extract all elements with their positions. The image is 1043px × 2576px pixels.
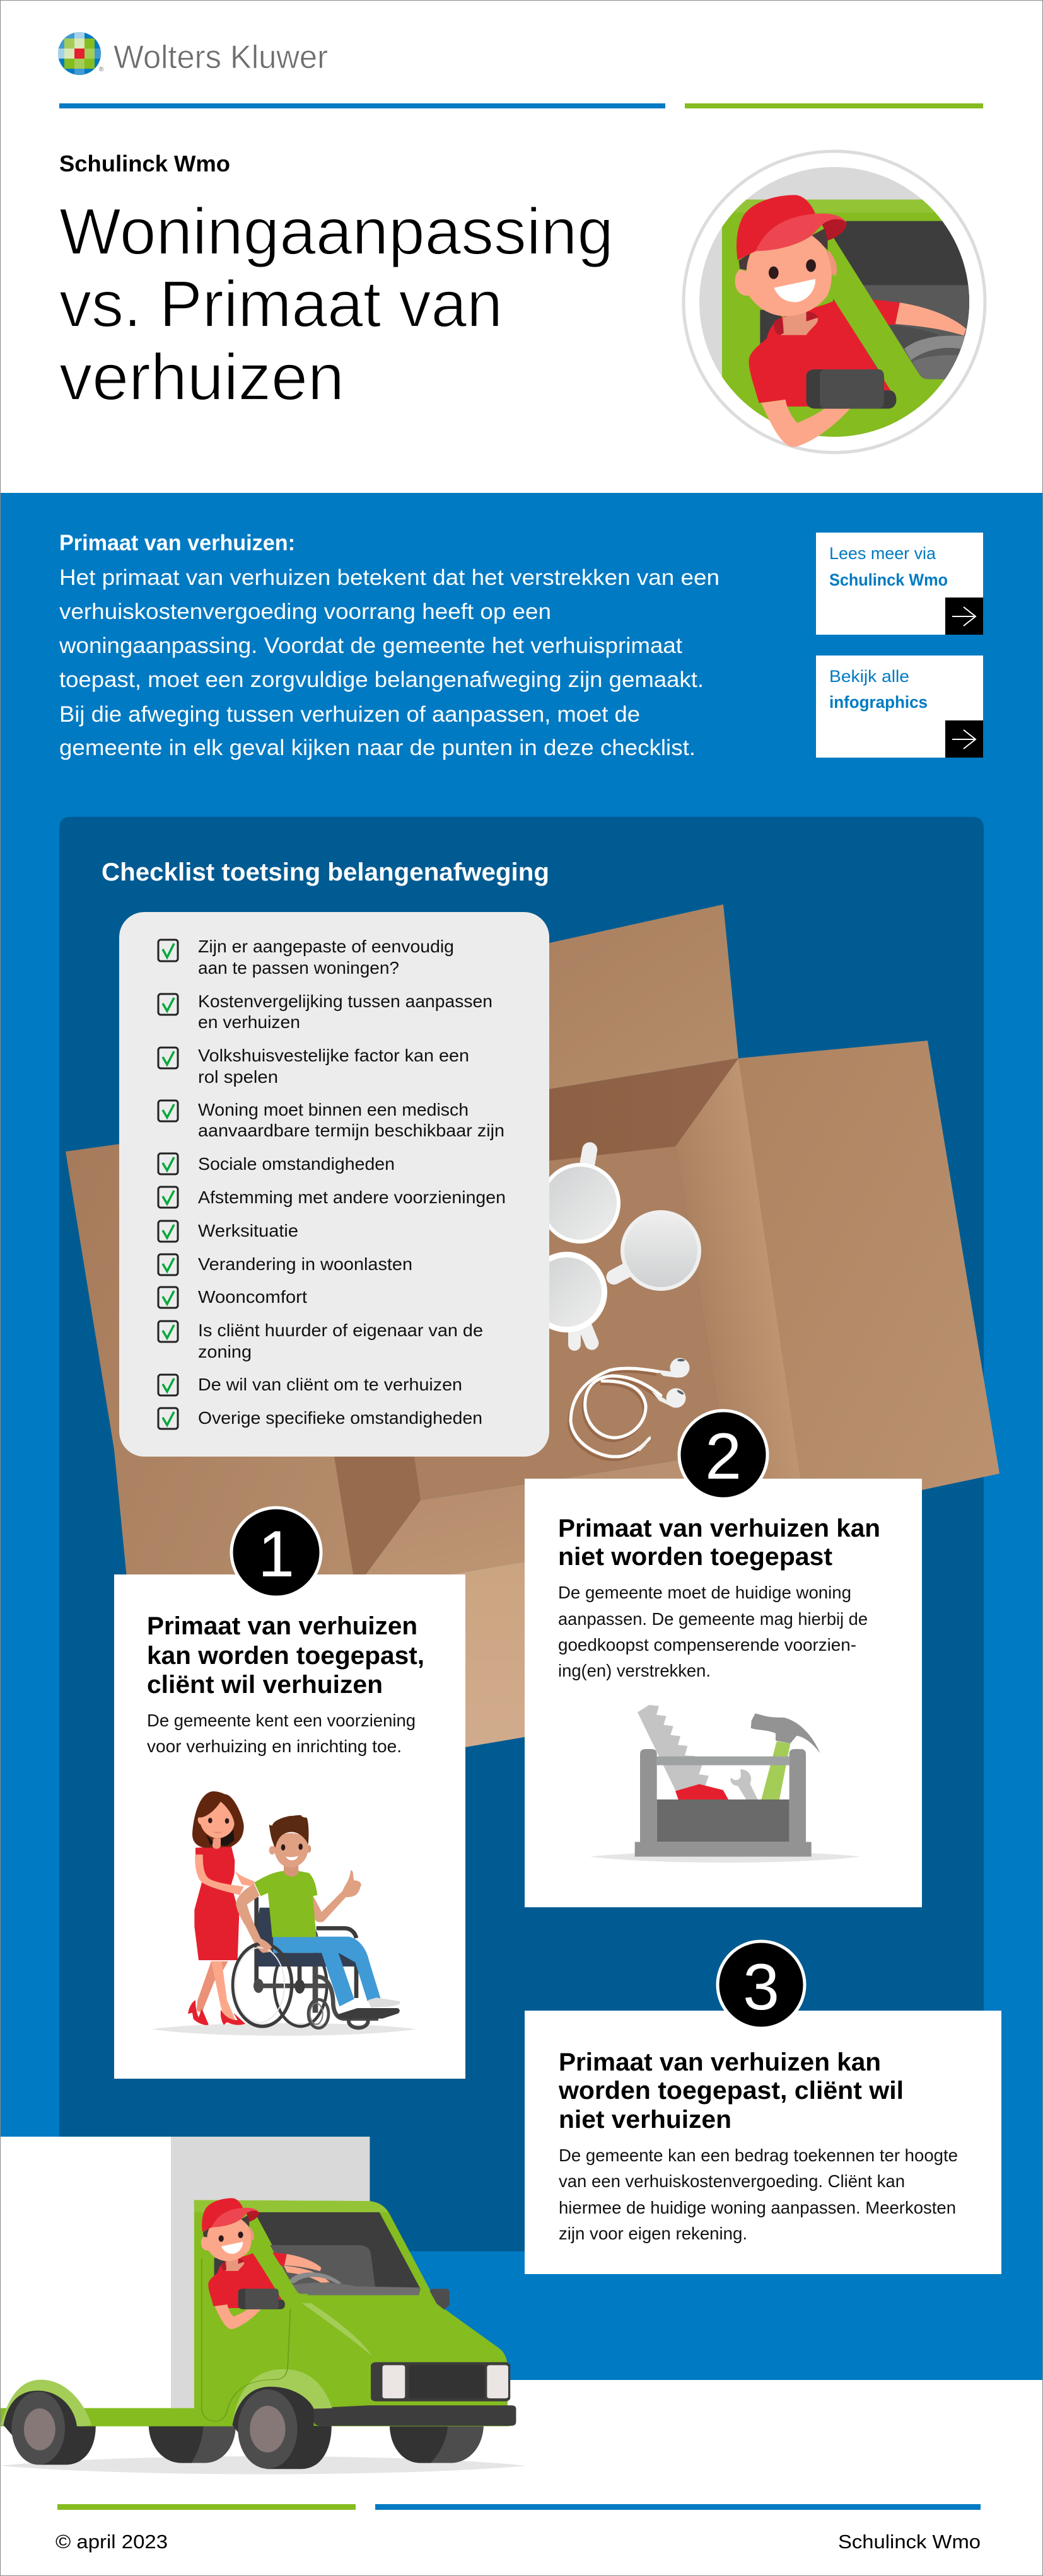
card 1 body: De gemeente kent een voorziening [147, 1711, 416, 1730]
hood highlight [302, 2303, 372, 2356]
door line [202, 2244, 291, 2421]
card 1 body [147, 1711, 416, 1756]
rear wheels behind [149, 2424, 236, 2463]
card 2 [525, 1411, 922, 1907]
checklist items: Is cliënt huurder of eigenaar van de [198, 1320, 483, 1340]
card 2 heading: niet worden toegepast [558, 1543, 832, 1571]
number badge 3: 3 [743, 1951, 779, 2024]
checklist items: Werksituatie [198, 1221, 298, 1240]
panel: checklist [119, 912, 549, 1457]
checklist items: en verhuizen [198, 1012, 300, 1032]
title: vs. Primaat van [59, 268, 503, 341]
card 2 body [558, 1583, 868, 1680]
card 3 heading: Primaat van verhuizen kan [559, 2048, 881, 2076]
button: infographics [816, 656, 983, 758]
logo globe icon [58, 32, 101, 75]
card 3 [525, 1941, 1001, 2274]
card 1 body: voor verhuizing en inrichting toe. [147, 1736, 402, 1756]
card 3 body: van een verhuiskostenvergoeding. Cliënt kan [559, 2171, 905, 2191]
intro paragraph: toepast, moet een zorgvuldige belangenafweging zijn gemaakt. [59, 667, 704, 692]
footer date: © april 2023 [55, 2531, 168, 2553]
card 1 heading: cliënt wil verhuizen [147, 1671, 383, 1699]
rear wheel [3, 2391, 96, 2465]
card 2 heading: Primaat van verhuizen kan [558, 1515, 880, 1542]
card 2 heading [558, 1515, 880, 1571]
header bar blue [59, 103, 665, 108]
cab [0, 2200, 510, 2427]
bumper [313, 2405, 516, 2426]
number badge 1 [231, 1508, 321, 1597]
card 1 [114, 1508, 465, 2079]
title: verhuizen [59, 341, 344, 414]
checklist items: De wil van cliënt om te verhuizen [198, 1375, 462, 1394]
checklist items: Verandering in woonlasten [198, 1254, 412, 1274]
button: infographics: infographics [829, 693, 928, 712]
checklist items: Wooncomfort [198, 1287, 307, 1307]
panel: checklist background [59, 817, 984, 2251]
cups [527, 1141, 701, 1352]
card 2 body: aanpassen. De gemeente mag hierbij de [558, 1609, 868, 1629]
ground shadow [0, 2456, 527, 2475]
button: infographics: Bekijk alle [829, 667, 909, 686]
subtitle: Schulinck Wmo [59, 151, 230, 176]
number badge 2: 2 [705, 1420, 742, 1493]
checklist items: Kostenvergelijking tussen aanpassen [198, 991, 492, 1011]
intro text [59, 531, 720, 760]
footer bar green [57, 2504, 356, 2510]
intro paragraph: woningaanpassing. Voordat de gemeente het verhuisprimaat [59, 633, 682, 658]
card 1 heading [147, 1612, 424, 1699]
button: lees meer [816, 533, 983, 635]
checklist items: Volkshuisvestelijke factor kan een [198, 1046, 469, 1065]
checklist heading: Checklist toetsing belangenafweging [102, 858, 549, 886]
footer bar blue [375, 2504, 981, 2510]
intro paragraph [59, 565, 720, 760]
checklist items: Woning moet binnen een medisch [198, 1100, 469, 1119]
man [236, 1815, 400, 2019]
checklist items: Zijn er aangepaste of eenvoudig [198, 937, 454, 956]
card 2 body: ing(en) verstrekken. [558, 1661, 711, 1680]
checklist items: aan te passen woningen? [198, 958, 399, 978]
icon: arrow [952, 730, 976, 749]
card 3 body: zijn voor eigen rekening. [559, 2224, 747, 2243]
card 3 body: hiermee de huidige woning aanpassen. Meerkosten [559, 2198, 956, 2217]
checklist items: zoning [198, 1342, 252, 1361]
number badge 1: 1 [258, 1518, 294, 1591]
illustration: couple with wheelchair [151, 1791, 416, 2036]
title [59, 195, 614, 414]
card 3 body: De gemeente kan een bedrag toekennen ter hoogte [559, 2146, 958, 2165]
checklist items: Afstemming met andere voorzieningen [198, 1187, 506, 1207]
number badge 3 [718, 1941, 805, 2028]
woman [188, 1791, 254, 2025]
blue section background [0, 493, 1043, 2380]
logo wordmark: Wolters Kluwer [114, 39, 328, 76]
logo: Wolters Kluwer [58, 32, 328, 76]
icon: arrow [952, 607, 976, 626]
intro paragraph: Het primaat van verhuizen betekent dat het verstrekken van een [59, 565, 720, 590]
grille [371, 2362, 510, 2401]
wheelchair [257, 1897, 378, 2028]
intro paragraph: verhuiskostenvergoeding voorrang heeft op een [59, 599, 551, 624]
truck box [0, 2137, 370, 2408]
front wheel [233, 2387, 332, 2469]
icon: driver in circle [684, 151, 993, 462]
card 3 heading: worden toegepast, cliënt wil [558, 2077, 904, 2105]
checklist items: Overige specifieke omstandigheden [198, 1408, 482, 1428]
checklist items [198, 937, 506, 1428]
intro heading: Primaat van verhuizen: [59, 531, 295, 555]
button: lees meer: Lees meer via [829, 544, 936, 563]
checklist items: rol spelen [198, 1067, 278, 1087]
card 1 heading: kan worden toegepast, [147, 1642, 424, 1670]
header bar green [685, 103, 983, 108]
earphones [569, 1358, 690, 1460]
checkboxes [158, 940, 178, 1429]
card 2 body: goedkoopst compenserende voorzien- [558, 1635, 856, 1655]
big wheel [233, 1944, 329, 2028]
illustration: toolbox [590, 1705, 861, 1863]
truck driver [201, 2198, 321, 2329]
checklist items: aanvaardbare termijn beschikbaar zijn [198, 1121, 504, 1140]
button: lees meer: Schulinck Wmo [829, 570, 948, 589]
card 1 heading: Primaat van verhuizen [147, 1612, 417, 1640]
fenders [233, 2369, 332, 2425]
logo registered mark: ® [99, 66, 104, 73]
footer brand: Schulinck Wmo [838, 2531, 981, 2553]
illustration: truck [0, 2198, 527, 2475]
card 3 heading [558, 2048, 904, 2134]
intro paragraph: gemeente in elk geval kijken naar de punten in deze checklist. [59, 736, 696, 760]
title: Woningaanpassing [59, 195, 614, 269]
card 3 body [559, 2146, 958, 2243]
number badge 2 [679, 1411, 767, 1499]
checklist items: Sociale omstandigheden [198, 1154, 395, 1174]
card 3 heading: niet verhuizen [559, 2106, 731, 2134]
card 2 body: De gemeente moet de huidige woning [558, 1583, 851, 1602]
illustration: cardboard box [66, 904, 999, 1828]
intro paragraph: Bij die afweging tussen verhuizen of aanpassen, moet de [59, 702, 640, 727]
